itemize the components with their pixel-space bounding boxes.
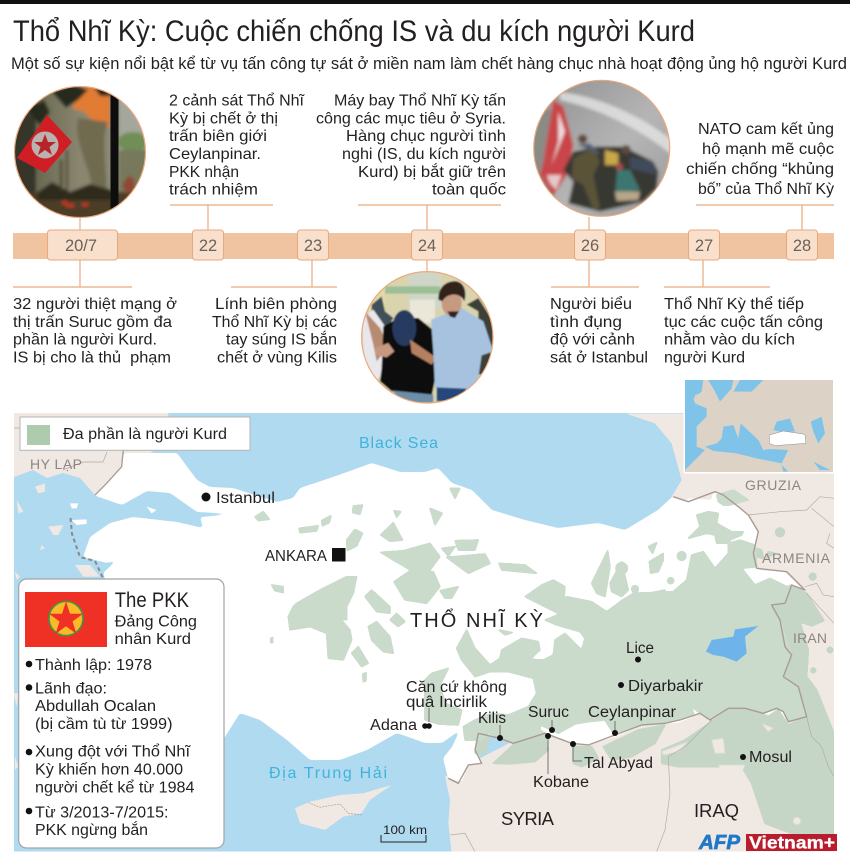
sea labels: [269, 435, 438, 782]
text: event 24: Kurd) bị bắt giữ trên: [358, 162, 506, 181]
Lice: Lice: [626, 640, 654, 657]
text: event 26: sát ở Istanbul: [550, 349, 648, 366]
fact: leader: Abdullah Ocalan: [35, 698, 156, 715]
text: event 20/7: IS bị cho là thủ phạm: [13, 349, 171, 366]
fact: founded: Thành lập: 1978: [35, 657, 152, 674]
text: event 26: tình đụng: [550, 314, 622, 331]
date: 27: 27: [695, 237, 713, 255]
timeline: [13, 205, 834, 287]
text: event 27: tục các cuộc tấn công: [664, 314, 823, 331]
text: event 26: độ với cảnh: [550, 332, 635, 348]
fact: conflict: người chết kể từ 1984: [35, 778, 195, 796]
text: event 24: toàn quốc: [432, 182, 506, 199]
text: event 24: nghi (IS, du kích người: [342, 146, 506, 163]
date: 26: 26: [581, 237, 599, 255]
Incirlik: Căn cứ không: [406, 679, 507, 696]
land: eastern neighbours: [445, 413, 834, 853]
text: event 27: [664, 295, 823, 366]
text: event 23: [212, 296, 337, 366]
legend: [20, 417, 250, 450]
country labels: GRUZIA: [745, 477, 802, 493]
legend label: Đa phần là người Kurd: [63, 426, 227, 443]
date: 23: 23: [304, 237, 322, 255]
Diyarbakir: Diyarbakir: [628, 678, 703, 695]
Suruc: [528, 704, 569, 733]
Greek border: [95, 450, 123, 495]
date: 23: [298, 230, 328, 260]
Incirlik: quâ Incirlik: [406, 694, 487, 711]
Kurdish area: western blobs: [255, 505, 440, 682]
date: 24: 24: [418, 237, 436, 255]
sea border (dashed): [70, 518, 103, 578]
sea labels: Black Sea: [359, 435, 438, 452]
Adana: Adana: [370, 717, 417, 734]
Kilis: [478, 710, 506, 741]
Tal Abyad: [570, 741, 653, 772]
text: event 22: PKK nhận: [169, 164, 239, 181]
text: event 20/7: [13, 296, 178, 366]
icon: PKK flag: [25, 592, 107, 647]
logo: Vietnam+: Vietnam+: [749, 832, 835, 852]
lake Van: [706, 626, 758, 662]
Kurdish area: Iran side: [757, 528, 834, 733]
Incirlik: [406, 679, 507, 722]
text: event 28: chiến chống “khủng: [686, 161, 834, 178]
fact: leader: (bị cầm tù từ 1999): [35, 716, 172, 733]
text: event 26: Người biểu: [550, 295, 632, 313]
panel heading: Đảng Công: [115, 614, 197, 631]
text: event 23: Lính biên phòng: [215, 296, 337, 313]
text: event 27: nhằm vào du kích: [664, 330, 795, 348]
map: [13, 413, 837, 853]
country labels: IRAQ: [694, 800, 739, 821]
panel: the PKK: [19, 579, 224, 848]
text: event 24: Hàng chục người tình: [346, 128, 506, 145]
city labels and markers: [202, 490, 792, 791]
legend swatch: [27, 425, 50, 445]
date: 22: 22: [199, 237, 217, 255]
text: event 24: công các mục tiêu ở Syria.: [316, 110, 506, 127]
inset locator map: [684, 378, 834, 474]
Ankara: ANKARA: [265, 548, 328, 565]
country labels: SYRIA: [501, 808, 555, 829]
text: event 28: [686, 121, 834, 198]
photo: red flag in smoke: [10, 82, 150, 222]
date: 24: [412, 230, 442, 260]
text: event 27: người Kurd: [664, 349, 745, 366]
fact: conflict: [26, 743, 195, 796]
text: event 26: [550, 295, 648, 366]
photo: water cannon protest: [533, 80, 670, 217]
text: event 28: bố” của Thổ Nhĩ Kỳ: [698, 180, 834, 198]
Tal Abyad: Tal Abyad: [584, 755, 653, 772]
Kurdish area: central blobs: [430, 488, 628, 598]
text: event 22: Kỳ bị chết ở thị: [169, 110, 278, 127]
text: event 23: chết ở vùng Kilis: [217, 349, 337, 366]
text: event 22: [169, 92, 306, 199]
Ceylanpinar: [588, 704, 676, 736]
text: event 22: Ceylanpinar.: [169, 146, 261, 163]
date: 28: 28: [793, 237, 811, 255]
fact: ceasefire: Từ 3/2013-7/2015:: [35, 804, 168, 821]
fact: leader: Lãnh đạo:: [35, 680, 107, 697]
country labels: ARMENIA: [762, 550, 831, 566]
text: event 22: trấn biên giới: [169, 128, 267, 145]
Ceylanpinar: Ceylanpinar: [588, 704, 676, 721]
fact: ceasefire: [26, 804, 169, 839]
country labels: [30, 456, 831, 829]
scale bar: 100 km: [383, 823, 427, 837]
date: 20/7: [48, 230, 118, 260]
Istanbul: Istanbul: [216, 490, 275, 507]
text: event 20/7: 32 người thiệt mạng ở: [13, 296, 178, 313]
Kurdish area: outside Turkey: [475, 710, 837, 833]
country labels: IRAN: [793, 630, 827, 646]
panel heading: The PKK: [115, 589, 189, 612]
Mosul: Mosul: [749, 749, 792, 766]
Kurdish area: south-east Turkey west of Lice: [425, 580, 665, 743]
fact: conflict: Kỳ khiến hơn 40.000: [35, 761, 183, 778]
fact: leader: [26, 680, 173, 733]
Turkish borders: [448, 492, 807, 783]
fact: ceasefire: PKK ngừng bắn: [35, 820, 148, 839]
logo: AFP: AFP: [698, 832, 741, 854]
Kurdish area: eastern Turkey: [616, 490, 807, 723]
text: event 22: 2 cảnh sát Thổ Nhĩ: [169, 92, 306, 110]
Suruc: Suruc: [528, 704, 569, 721]
date: 22: [192, 230, 224, 260]
date: 26: [574, 230, 606, 260]
country labels: THỔ NHĨ KỲ: [410, 608, 543, 632]
date: 27: [688, 230, 720, 260]
land: Greece and Bulgaria: [14, 413, 172, 495]
text: event 20/7: thị trấn Suruc gồm đa: [13, 314, 172, 331]
date: 28: [786, 230, 818, 260]
text: event 20/7: phần là người Kurd.: [13, 332, 157, 348]
text: event 27: Thổ Nhĩ Kỳ thể tiếp: [664, 295, 804, 313]
text: event 24: [316, 92, 506, 199]
title: Thổ Nhĩ Kỳ: Cuộc chiến chống IS và du kích người Kurd: [13, 15, 695, 48]
sea labels: Địa Trung Hải: [269, 765, 387, 782]
subtitle: Một số sự kiện nổi bật kể từ vụ tấn công tự sát ở miền nam làm chết hàng chục nhà hoạt động ủng hộ người Kurd: [11, 54, 847, 73]
photo: arrested men: [361, 271, 494, 404]
text: event 23: Thổ Nhĩ Kỳ bị các: [212, 313, 337, 331]
fact: conflict: Xung đột với Thổ Nhĩ: [35, 743, 192, 761]
Kobane: [533, 733, 589, 791]
Kilis: Kilis: [478, 710, 506, 727]
text: event 22: trách nhiệm: [169, 182, 258, 199]
text: event 24: Máy bay Thổ Nhĩ Kỳ tấn: [334, 92, 506, 110]
text: event 28: NATO cam kết ủng: [698, 121, 834, 138]
land: Turkey: [83, 453, 807, 782]
country labels: HY LẠP: [30, 456, 82, 472]
land: Cyprus: [295, 785, 392, 830]
top black bar: [0, 0, 850, 4]
Kobane: Kobane: [533, 774, 589, 791]
text: event 28: hộ mạnh mẽ cuộc: [702, 141, 834, 158]
sea: [14, 413, 684, 852]
panel heading: nhân Kurd: [115, 631, 191, 648]
text: event 23: tay súng IS bắn: [226, 330, 337, 348]
scale bar: [381, 823, 427, 842]
thin foreign borders: [450, 497, 834, 852]
panel heading: [115, 589, 197, 648]
islands: [13, 483, 157, 770]
date: 20/7: 20/7: [65, 237, 97, 255]
